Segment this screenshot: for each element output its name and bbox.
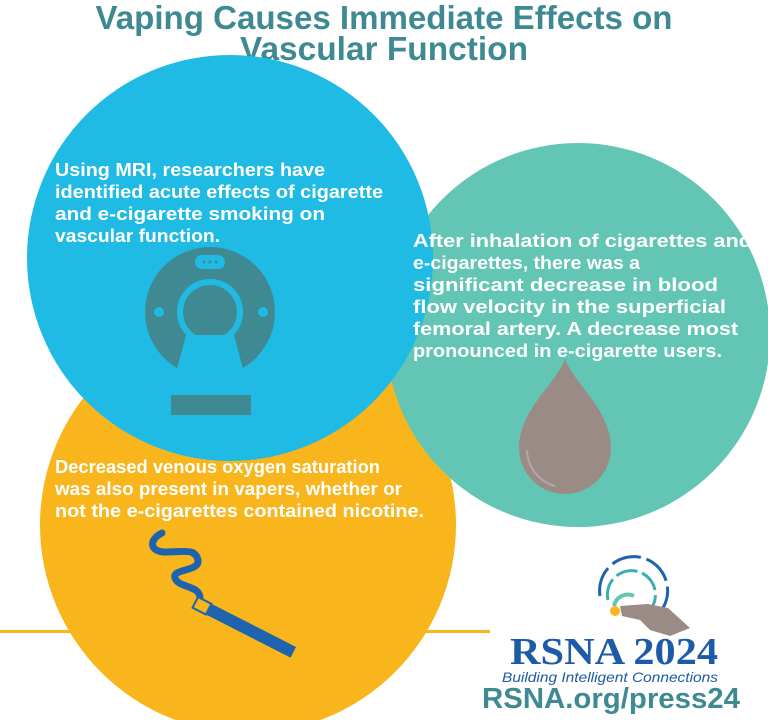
text block: green: e-cigarettes, there was a: [413, 252, 641, 273]
panel: blue circle: [27, 55, 433, 461]
text block: orange: Decreased venous oxygen saturation: [55, 456, 380, 477]
text block: blue: identified acute effects of cigarette: [55, 181, 383, 202]
text block: green: [413, 230, 752, 361]
text block: orange: was also present in vapers, whether or: [54, 478, 402, 499]
text block: green: femoral artery. A decrease most: [413, 318, 738, 339]
text block: green: After inhalation of cigarettes and: [413, 230, 752, 251]
icon: logo arcs: [600, 557, 690, 636]
logo: RSNA 2024: [482, 557, 740, 715]
title: Vascular Function: [240, 30, 528, 67]
text block: green: pronounced in e-cigarette users.: [413, 340, 722, 361]
decorative orange line: [0, 630, 490, 633]
text block: green: flow velocity in the superficial: [413, 296, 726, 317]
text block: orange: [54, 456, 424, 521]
logo: RSNA 2024: RSNA 2024: [510, 631, 718, 673]
panel: orange circle: [40, 317, 456, 720]
icon: MRI scanner: [154, 255, 268, 415]
title: [96, 0, 672, 67]
text block: blue: [55, 159, 383, 246]
text block: blue: vascular function.: [55, 225, 220, 246]
icon: blood drop: [519, 359, 611, 494]
text block: green: significant decrease in blood: [413, 274, 718, 295]
text block: orange: not the e-cigarettes contained nicotine.: [55, 500, 424, 521]
text block: blue: Using MRI, researchers have: [55, 159, 325, 180]
logo: RSNA 2024: Building Intelligent Connections: [502, 669, 718, 685]
text block: blue: and e-cigarette smoking on: [55, 203, 325, 224]
title: Vaping Causes Immediate Effects on: [96, 0, 672, 36]
logo: RSNA 2024: RSNA.org/press24: [482, 683, 740, 715]
panel: green circle: [386, 143, 768, 527]
icon: e-cigarette: [153, 533, 296, 658]
